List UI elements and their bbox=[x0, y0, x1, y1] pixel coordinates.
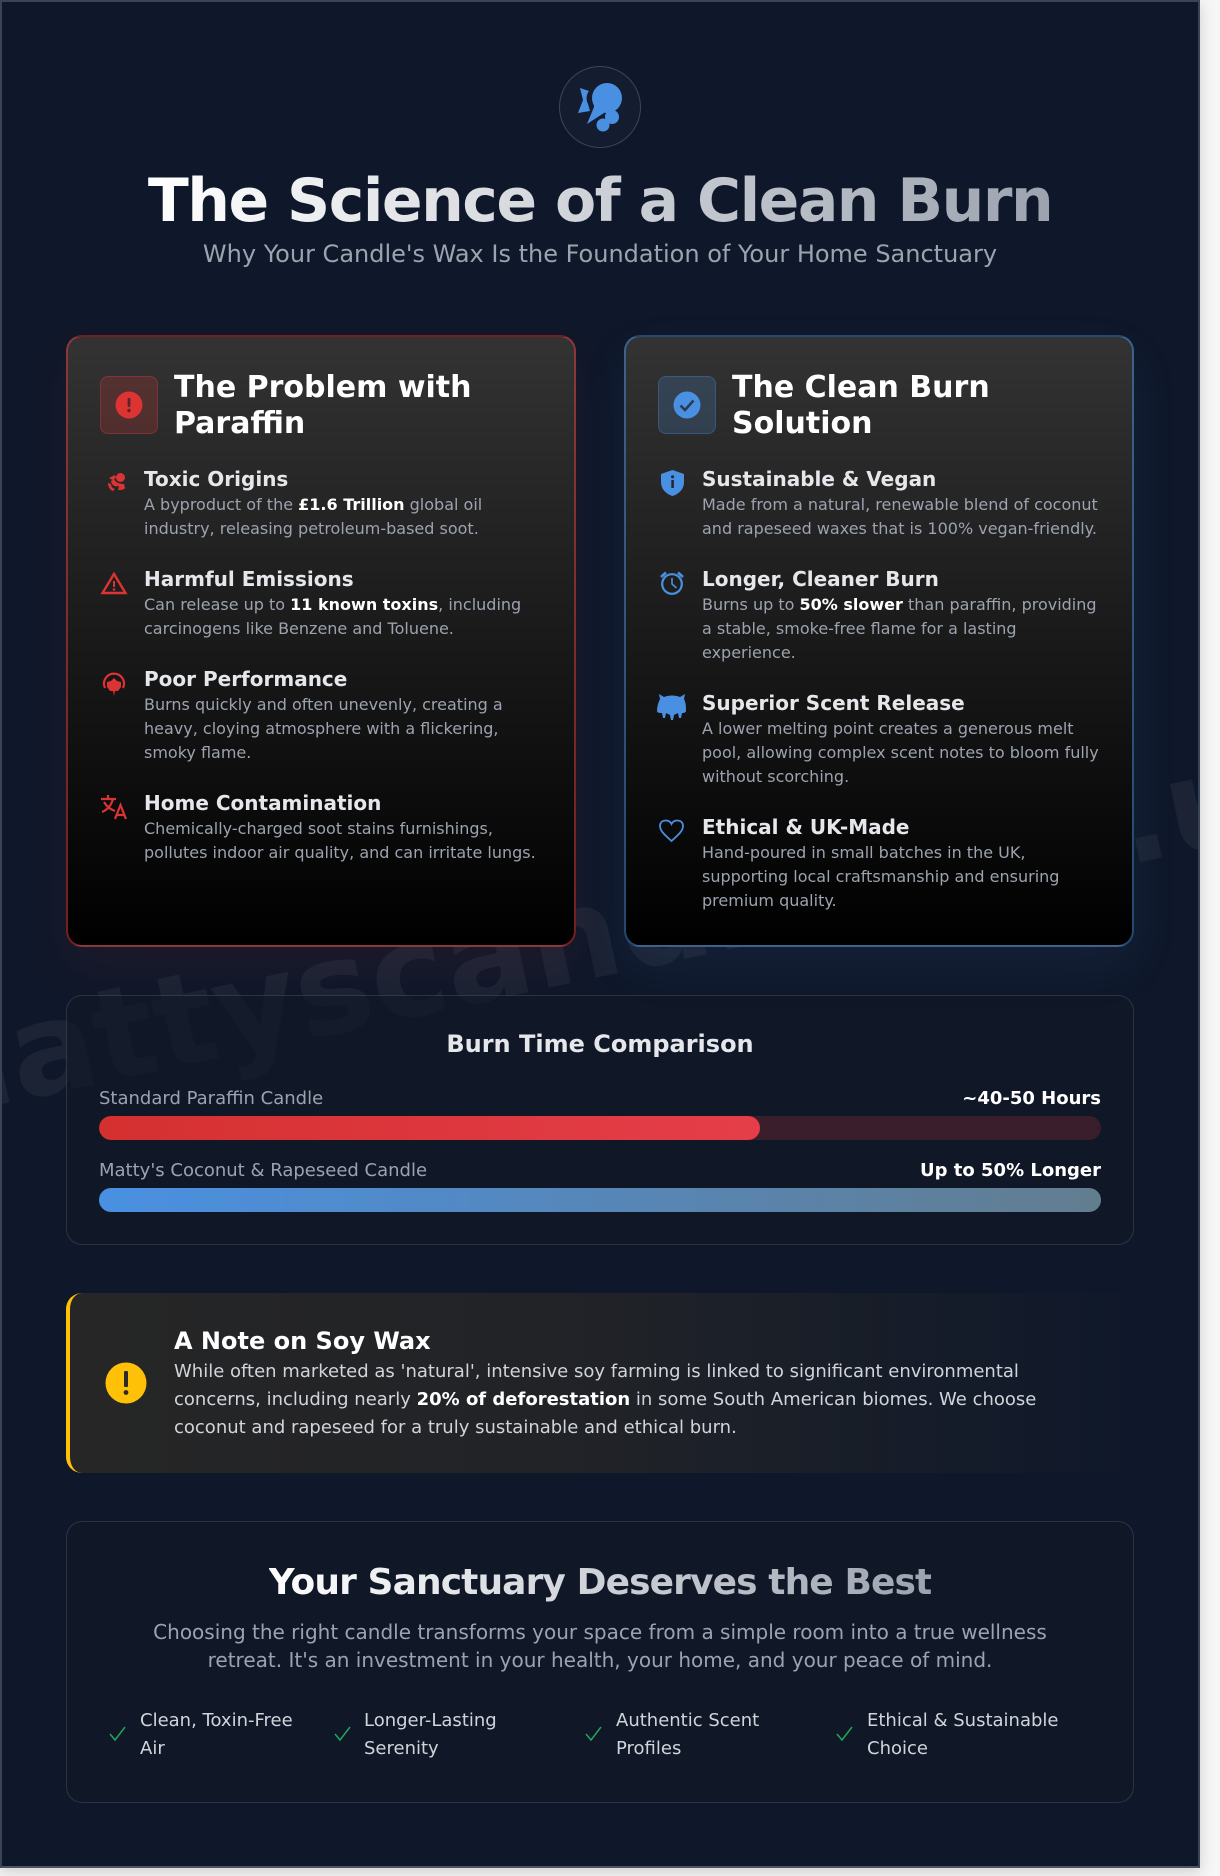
item: toxic origins bbox=[108, 467, 482, 538]
text: scent profiles: Authentic Scent bbox=[616, 1710, 759, 1731]
text: serenity: Longer-Lasting bbox=[364, 1710, 497, 1731]
item: poor performance: Poor Performance bbox=[144, 667, 347, 691]
heading: solution: The Clean Burn bbox=[732, 370, 990, 405]
text: sanctuary: Choosing the right candle transforms your space from a simple room into a true wellness bbox=[153, 1620, 1047, 1644]
text: serenity: Serenity bbox=[364, 1738, 439, 1759]
item: sustainable and vegan: and rapeseed waxes that is 100% vegan-friendly. bbox=[702, 519, 1097, 538]
title: The Science of a Clean Burn bbox=[148, 166, 1052, 236]
icon: check circle bbox=[658, 376, 716, 434]
heading: solution bbox=[732, 370, 990, 441]
label: coconut and rapeseed: Matty's Coconut & Rapeseed Candle bbox=[99, 1160, 427, 1181]
item: toxic origins: A byproduct of the £1.6 Trillion global oil bbox=[144, 495, 482, 514]
panel: your sanctuary bbox=[66, 1521, 1134, 1803]
text: ethical choice: Choice bbox=[867, 1738, 928, 1759]
item: superior scent release: without scorching. bbox=[702, 767, 849, 786]
icon: check bbox=[836, 1726, 852, 1742]
text: soy wax: coconut and rapeseed for a truly sustainable and ethical burn. bbox=[174, 1417, 737, 1438]
text: clean air: Clean, Toxin-Free bbox=[140, 1710, 293, 1731]
text: sanctuary: retreat. It's an investment in your health, your home, and your peace of mind. bbox=[208, 1648, 992, 1672]
item: ethical and uk-made: supporting local craftsmanship and ensuring bbox=[702, 867, 1059, 886]
feature: clean air bbox=[110, 1710, 293, 1759]
item: ethical and uk-made: Ethical & UK-Made bbox=[702, 815, 909, 839]
item: superior scent release: pool, allowing complex scent notes to bloom fully bbox=[702, 743, 1099, 762]
icon: check bbox=[110, 1726, 126, 1742]
bar: coconut and rapeseed bbox=[99, 1188, 1101, 1212]
item: ethical and uk-made bbox=[659, 815, 1059, 910]
item: home contamination bbox=[101, 791, 536, 862]
heading: problem: Paraffin bbox=[174, 406, 305, 441]
feature: ethical choice bbox=[836, 1710, 1058, 1759]
item: longer cleaner burn: a stable, smoke-free flame for a lasting bbox=[702, 619, 1017, 638]
heading: problem bbox=[174, 370, 472, 441]
item: poor performance bbox=[102, 667, 503, 762]
text: soy wax: While often marketed as 'natural', intensive soy farming is linked to significant environmental bbox=[174, 1361, 1019, 1382]
icon: warning bbox=[106, 1362, 146, 1404]
text: clean air: Air bbox=[140, 1738, 165, 1759]
item: longer cleaner burn: experience. bbox=[702, 643, 796, 662]
text: scent profiles bbox=[616, 1710, 759, 1759]
item: sustainable and vegan: Made from a natural, renewable blend of coconut bbox=[702, 495, 1098, 514]
heading: burn time: Burn Time Comparison bbox=[446, 1030, 754, 1058]
item: superior scent release: A lower melting point creates a generous melt bbox=[702, 719, 1074, 738]
icon: header logo bbox=[559, 66, 641, 148]
icon: check bbox=[334, 1726, 350, 1742]
icon: alert circle bbox=[100, 376, 158, 434]
item: superior scent release: Superior Scent Release bbox=[702, 691, 965, 715]
item: ethical and uk-made: Hand-poured in small batches in the UK, bbox=[702, 843, 1025, 862]
item: poor performance: Burns quickly and often unevenly, creating a bbox=[144, 695, 503, 714]
item: home contamination: Chemically-charged soot stains furnishings, bbox=[144, 819, 493, 838]
item: ethical and uk-made: premium quality. bbox=[702, 891, 837, 910]
item: longer cleaner burn: Burns up to 50% slower than paraffin, providing bbox=[702, 595, 1097, 614]
item: longer cleaner burn bbox=[660, 567, 1097, 662]
panel: the problem with paraffin bbox=[66, 335, 576, 947]
text: soy wax bbox=[174, 1361, 1036, 1438]
item: poor performance: heavy, cloying atmosphere with a flickering, bbox=[144, 719, 498, 738]
label: coconut and rapeseed: Up to 50% Longer bbox=[920, 1160, 1101, 1181]
bar: paraffin bbox=[99, 1116, 1101, 1140]
panel: burn time comparison bbox=[66, 995, 1134, 1245]
item: poor performance: smoky flame. bbox=[144, 743, 251, 762]
feature: scent profiles bbox=[586, 1710, 759, 1759]
text: soy wax: concerns, including nearly 20% of deforestation in some South American biomes. We choose bbox=[174, 1389, 1036, 1410]
label: paraffin: Standard Paraffin Candle bbox=[99, 1088, 323, 1109]
item: sustainable and vegan bbox=[661, 467, 1098, 538]
callout: note on soy wax bbox=[66, 1293, 1134, 1473]
item: longer cleaner burn: Longer, Cleaner Burn bbox=[702, 567, 939, 591]
item: harmful emissions: Harmful Emissions bbox=[144, 567, 354, 591]
item: toxic origins: industry, releasing petroleum-based soot. bbox=[144, 519, 479, 538]
heading: solution: Solution bbox=[732, 406, 872, 441]
label: paraffin bbox=[99, 1088, 1101, 1109]
label: paraffin: ~40-50 Hours bbox=[962, 1088, 1101, 1109]
item: home contamination: pollutes indoor air quality, and can irritate lungs. bbox=[144, 843, 536, 862]
feature: serenity bbox=[334, 1710, 497, 1759]
label: coconut and rapeseed bbox=[99, 1160, 1101, 1181]
text: sanctuary bbox=[153, 1620, 1047, 1672]
text: scent profiles: Profiles bbox=[616, 1738, 681, 1759]
item: harmful emissions: Can release up to 11 known toxins, including bbox=[144, 595, 521, 614]
item: sustainable and vegan: Sustainable & Vegan bbox=[702, 467, 936, 491]
subtitle: Why Your Candle's Wax Is the Foundation of Your Home Sanctuary bbox=[203, 240, 997, 268]
item: harmful emissions: carcinogens like Benzene and Toluene. bbox=[144, 619, 454, 638]
icon: check bbox=[586, 1726, 602, 1742]
heading: problem: The Problem with bbox=[174, 370, 472, 405]
item: superior scent release bbox=[657, 691, 1099, 786]
item: home contamination: Home Contamination bbox=[144, 791, 381, 815]
text: clean air bbox=[140, 1710, 293, 1759]
panel: the clean burn solution bbox=[624, 335, 1134, 947]
item: harmful emissions bbox=[100, 567, 521, 638]
item: toxic origins: Toxic Origins bbox=[144, 467, 288, 491]
text: serenity bbox=[364, 1710, 497, 1759]
text: ethical choice: Ethical & Sustainable bbox=[867, 1710, 1058, 1731]
heading: soy wax: A Note on Soy Wax bbox=[174, 1327, 431, 1355]
text: ethical choice bbox=[867, 1710, 1058, 1759]
heading: sanctuary: Your Sanctuary Deserves the Best bbox=[269, 1562, 931, 1603]
